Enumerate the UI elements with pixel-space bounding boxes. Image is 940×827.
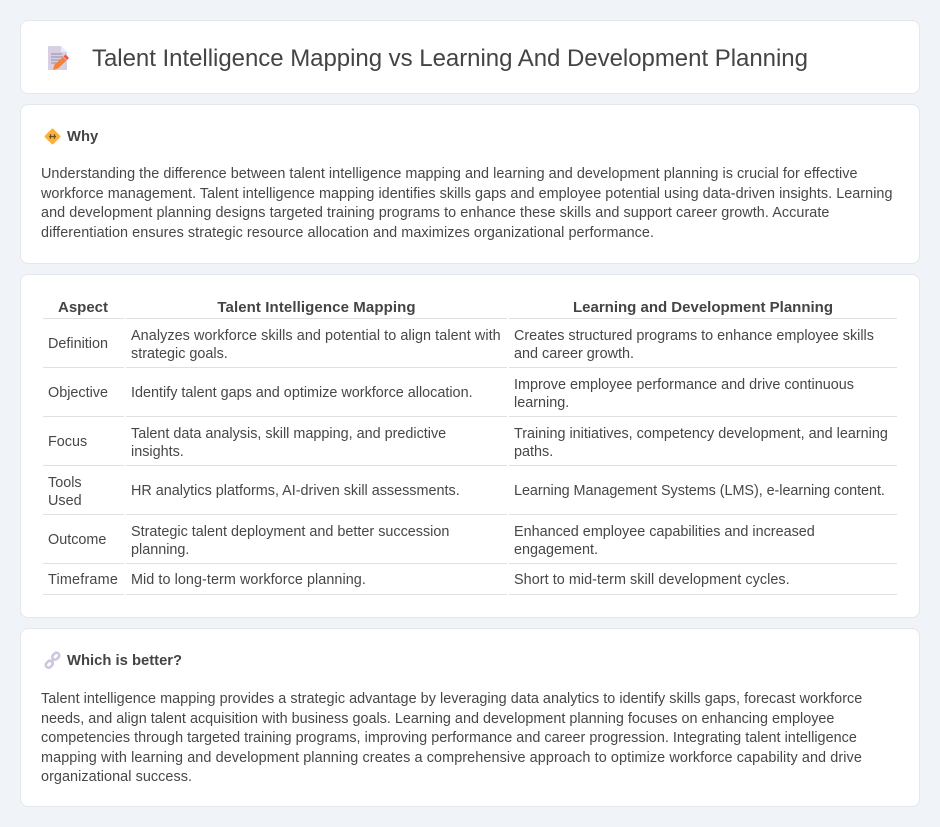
icon: warning diamond: [44, 128, 60, 144]
row: timeframe: Short to mid-term skill development cycles.: [514, 572, 790, 588]
row: definition: Definition: [48, 336, 108, 352]
text block: why: and development planning designs targeted training programs to enhance these skills and support career growth. Accurate: [41, 205, 830, 221]
text block: why: [41, 166, 893, 240]
row: outcome: Strategic talent deployment and better succession: [131, 524, 449, 540]
row: timeframe: [48, 572, 790, 588]
panel: header: [20, 20, 920, 94]
row: timeframe: Mid to long-term workforce planning.: [131, 572, 366, 588]
text block: which is better: Talent intelligence mapping provides a strategic advantage by leveraging data analytics to identify skills gaps, forecast workforce: [41, 691, 862, 707]
row: focus: Focus: [48, 434, 87, 450]
row: outcome: [48, 524, 815, 558]
text block: which is better: organizational success.: [41, 769, 192, 785]
row: definition: Analyzes workforce skills and potential to align talent with: [131, 328, 501, 344]
table header: aspect: Aspect: [58, 299, 108, 316]
row: focus: insights.: [131, 444, 184, 460]
row: tools used: [48, 475, 885, 509]
row: tools used: Used: [48, 493, 82, 509]
heading: why: Why: [67, 129, 98, 145]
row: tools used: Learning Management Systems (LMS), e-learning content.: [514, 483, 885, 499]
row: outcome: engagement.: [514, 542, 598, 558]
row: focus: Training initiatives, competency development, and learning: [514, 426, 888, 442]
panel: comparison table: [20, 274, 920, 618]
row: definition: Creates structured programs to enhance employee skills: [514, 328, 874, 344]
text block: why: workforce management. Talent intelligence mapping identifies skills gaps and employee potential using data-driven insights. Learning: [41, 186, 893, 202]
row: objective: Improve employee performance and drive continuous: [514, 377, 854, 393]
row: focus: Talent data analysis, skill mapping, and predictive: [131, 426, 446, 442]
row: outcome: Outcome: [48, 532, 106, 548]
text block: which is better: [41, 691, 862, 785]
row: outcome: Enhanced employee capabilities and increased: [514, 524, 815, 540]
panel: why: [20, 104, 920, 264]
row: focus: paths.: [514, 444, 553, 460]
heading: which is better: Which is better?: [67, 653, 182, 669]
row: tools used: Tools: [48, 475, 82, 491]
row: tools used: HR analytics platforms, AI-driven skill assessments.: [131, 483, 460, 499]
table header: talent intelligence mapping: Talent Intelligence Mapping: [217, 299, 416, 316]
icon: document with pencil: [48, 46, 69, 70]
row: outcome: planning.: [131, 542, 189, 558]
icon: link: [44, 651, 60, 669]
table header: learning and development planning: Learning and Development Planning: [573, 299, 833, 316]
row: objective: Identify talent gaps and optimize workforce allocation.: [131, 385, 473, 401]
row: definition: [48, 328, 874, 362]
row: definition: strategic goals.: [131, 346, 228, 362]
title: Talent Intelligence Mapping vs Learning And Development Planning: [92, 45, 808, 72]
text block: why: Understanding the difference between talent intelligence mapping and learning and development planning is crucial for effective: [41, 166, 858, 182]
row: timeframe: Timeframe: [48, 572, 118, 588]
row: objective: learning.: [514, 395, 569, 411]
text block: which is better: mapping with learning and development planning creates a comprehensive approach to optimize workforce capability and drive: [41, 750, 862, 766]
row: objective: Objective: [48, 385, 108, 401]
text block: which is better: needs, and align talent acquisition with business goals. Learning and development planning focuses on enhancing employee: [41, 710, 834, 726]
row: focus: [48, 426, 888, 460]
text block: which is better: competencies through targeted training programs, improving performance and career progression. Integrating talent intelligence: [41, 730, 857, 746]
row: definition: and career growth.: [514, 346, 634, 362]
row: objective: [48, 377, 854, 411]
panel: which is better: [20, 628, 920, 807]
text block: why: differentiation ensures strategic resource allocation and maximizes organizational performance.: [41, 224, 654, 240]
